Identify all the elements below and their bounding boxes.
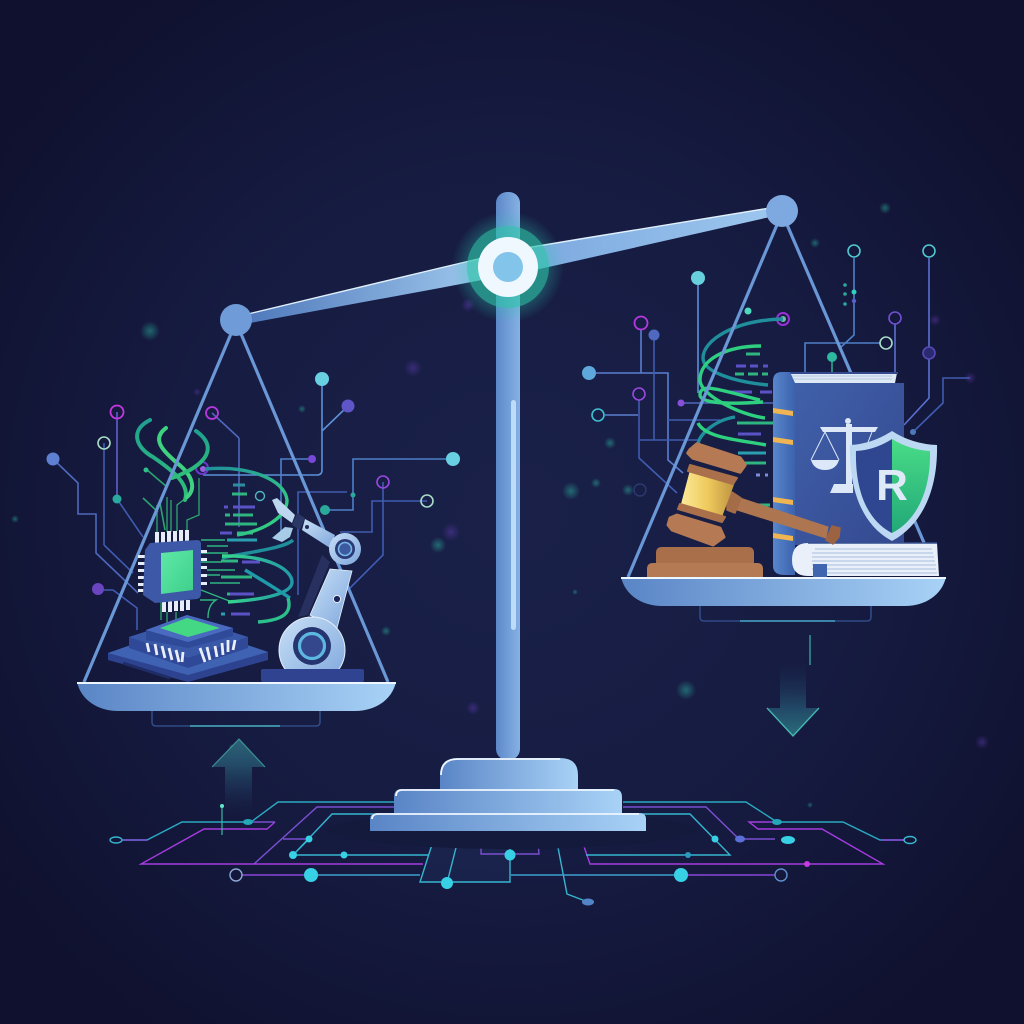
sound block bbox=[647, 547, 763, 577]
central hub bbox=[452, 211, 564, 323]
beam bbox=[248, 208, 770, 323]
gavel bbox=[647, 444, 840, 577]
stepped pedestal bbox=[370, 758, 646, 831]
glowing particles bbox=[11, 202, 989, 808]
left green tendrils bbox=[137, 420, 208, 500]
left helix bbox=[205, 468, 293, 622]
pedestal top tier bbox=[440, 758, 578, 789]
right helix bbox=[698, 319, 783, 445]
left circuit nodes bbox=[46, 372, 460, 595]
right pan bbox=[621, 577, 946, 621]
strings of right pan bbox=[628, 213, 925, 577]
pedestal middle tier bbox=[394, 789, 622, 813]
isometric chip stack bbox=[108, 615, 268, 682]
right code bars bbox=[730, 354, 773, 505]
base shadow bbox=[327, 811, 697, 849]
left code bars bbox=[200, 485, 260, 618]
chip bbox=[138, 530, 207, 612]
right circuit nodes bbox=[582, 245, 935, 496]
circuit base traces bbox=[110, 802, 916, 906]
pivot right bbox=[766, 195, 798, 227]
shield letter: R bbox=[876, 461, 908, 510]
gavel handle bbox=[727, 492, 840, 544]
law book bbox=[773, 372, 904, 575]
lower book bbox=[792, 543, 939, 577]
pivot left bbox=[220, 304, 252, 336]
pedestal bottom tier bbox=[370, 813, 646, 831]
arrow up bbox=[212, 739, 265, 835]
robot arm bbox=[261, 498, 364, 683]
arrow down bbox=[767, 635, 819, 736]
central post bbox=[496, 192, 520, 760]
right circuit lines bbox=[582, 245, 970, 496]
left circuit lines bbox=[46, 372, 460, 630]
strings of left pan bbox=[84, 322, 388, 682]
shield bbox=[850, 431, 937, 541]
left pan bbox=[77, 682, 396, 726]
icon: scales on book cover bbox=[811, 418, 878, 493]
gavel head bbox=[668, 444, 745, 545]
